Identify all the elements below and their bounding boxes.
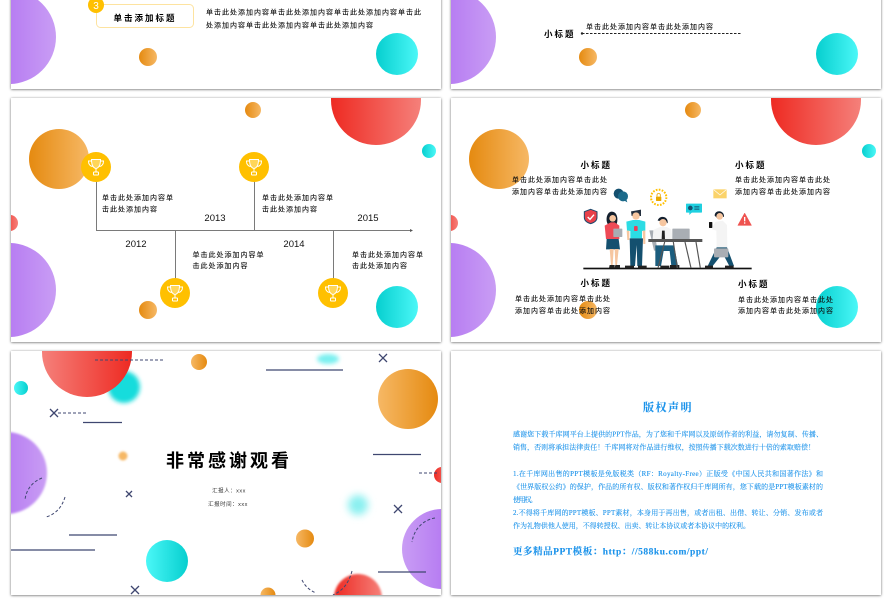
- caption top left: 添加内容单击此处添加内容: [512, 187, 608, 196]
- caption bottom left: 添加内容单击此处添加内容: [515, 306, 611, 315]
- caption bottom right: 小标题: [738, 279, 770, 289]
- slide 5: thank-you page: [0, 307, 482, 600]
- illustration: team at desk: [583, 189, 752, 269]
- purple circle: [451, 0, 496, 84]
- slide 1: numbered heading fragment: [0, 0, 441, 89]
- icon: warning: [738, 213, 751, 225]
- timeline axis: [96, 180, 413, 280]
- orange circle right: [378, 369, 438, 429]
- more templates link: 更多精品PPT模板：http：//588ku.com/ppt/: [513, 546, 708, 558]
- copyright body: 使用权。: [513, 495, 537, 504]
- copyright body: 《世界版权公约》的保护，作品的所有权、版权和著作权归千库网所有，您下载的是PPT模板素材的: [513, 482, 823, 492]
- caption top right: 添加内容单击此处添加内容: [735, 187, 831, 196]
- person: seated man with laptop: [648, 217, 702, 268]
- icon: shield: [584, 209, 597, 224]
- red circle bottom: [334, 574, 382, 600]
- decorative circles: [451, 98, 876, 337]
- caption top right: 单击此处添加内容单击此处: [735, 175, 831, 184]
- milestone text: 击此处添加内容: [192, 261, 248, 270]
- milestone text: 单击此处添加内容单: [262, 193, 334, 202]
- dashed leader: [581, 32, 741, 35]
- heading box: [96, 4, 194, 28]
- trophy marker 4: [318, 278, 348, 308]
- copyright body: 销售，否则将承担法律责任！千库网将对作品进行维权，按照传播下载次数进行十倍的索取赔偿！: [513, 442, 815, 452]
- caption top left: 单击此处添加内容单击此处: [512, 175, 608, 184]
- caption bottom left: 小标题: [580, 278, 612, 288]
- caption top right: 小标题: [735, 160, 767, 170]
- body text: 单击此处添加内容单击此处添加内容单击此处添加内容单击此: [206, 8, 422, 16]
- caption bottom left: 单击此处添加内容单击此处: [515, 294, 611, 303]
- year labels: 2012: [125, 239, 147, 250]
- number badge: 3: [93, 1, 99, 12]
- milestone text: 击此处添加内容: [352, 261, 408, 270]
- copyright body: 作为礼物供他人使用，不得转授权、出卖、转让本协议或者本协议中的权利。: [513, 521, 750, 531]
- year labels: 2014: [283, 239, 305, 250]
- year labels: 2013: [204, 213, 226, 224]
- icon: profile message: [686, 204, 702, 215]
- body text: 单击此处添加内容单击此处添加内容: [586, 22, 714, 31]
- caption bottom left: [515, 278, 612, 315]
- red small right: [434, 467, 450, 483]
- slide 2: subtitle with dashed leader: [402, 0, 881, 89]
- orange dot: [579, 48, 597, 66]
- trophy marker 2: [160, 278, 190, 308]
- trophy marker 3: [239, 152, 269, 182]
- cyan small circle: [14, 381, 28, 395]
- milestone text: 击此处添加内容: [262, 204, 318, 214]
- copyright body: 2.不得将千库网的PPT模板、PPT素材，本身用于再出售，或者出租、出借、转让、分销、发布或者: [513, 508, 823, 518]
- orange dot lower: [296, 530, 314, 548]
- cyan circle lower: [146, 540, 188, 582]
- blurred cyan glow: [348, 495, 368, 515]
- cross marks: [50, 354, 402, 594]
- navy lines: [11, 360, 438, 572]
- milestone text: [102, 193, 424, 270]
- heading text: 单击添加标题: [113, 13, 177, 23]
- thank-you title: 非常感谢观看: [166, 451, 292, 471]
- caption top right: [735, 160, 831, 196]
- icon: chat bubbles: [614, 189, 628, 202]
- decorative circles: [11, 98, 436, 337]
- red circle top: [42, 307, 132, 397]
- milestone text: 单击此处添加内容单: [192, 250, 264, 259]
- body text: 处添加内容单击此处添加内容单击此处添加内容: [206, 20, 374, 30]
- copyright heading: 版权声明: [643, 400, 693, 414]
- cyan circle: [816, 33, 858, 75]
- year labels: [126, 214, 378, 247]
- slide 6: copyright notice: [451, 351, 881, 595]
- caption bottom right: 单击此处添加内容单击此处: [738, 295, 834, 304]
- year labels: 2015: [357, 213, 379, 224]
- copyright body: [513, 430, 823, 531]
- copyright body: 1.在千库网出售的PPT模板是免版税类（RF：Royalty-Free）正版受《中国人民共和国著作法》和: [513, 469, 823, 478]
- caption bottom right: [738, 279, 834, 315]
- icon: lock in dotted ring: [651, 190, 666, 205]
- ground line: [583, 268, 752, 269]
- orange dot: [139, 48, 157, 66]
- trophy marker 1: [81, 152, 111, 182]
- purple circle: [11, 0, 56, 84]
- purple circle right: [402, 509, 482, 589]
- slide 4: team illustration with captions: [449, 96, 883, 344]
- caption top left: [512, 160, 612, 196]
- orange dot top: [191, 354, 207, 370]
- person: walking man with briefcase: [705, 211, 734, 268]
- blurred purple circle: [0, 432, 47, 514]
- body text: [206, 8, 422, 30]
- subtitle: 小标题: [544, 29, 576, 39]
- orange dot bottom: [260, 588, 276, 600]
- caption top left: 小标题: [580, 160, 612, 170]
- cyan circle: [376, 33, 418, 75]
- copyright body: 感谢您下载千库网平台上提供的PPT作品，为了您和千库网以及原创作者的利益，请勿复制、传播、: [513, 430, 823, 440]
- icon: envelope: [713, 189, 727, 198]
- blurred orange dot: [118, 452, 128, 460]
- date line: 汇报时间：xxx: [208, 500, 248, 508]
- person: woman with tablet: [605, 212, 622, 268]
- dashed arcs: [25, 478, 435, 595]
- person: man in cyan shirt: [625, 210, 647, 268]
- milestone text: 击此处添加内容: [102, 204, 158, 214]
- caption bottom right: 添加内容单击此处添加内容: [738, 306, 834, 315]
- number badge: [88, 0, 104, 13]
- milestone text: 单击此处添加内容单: [102, 193, 174, 202]
- milestone text: 单击此处添加内容单: [352, 250, 424, 259]
- reporter line: 汇报人：xxx: [212, 486, 246, 494]
- blurred cyan ellipse: [317, 354, 339, 364]
- slide 3: timeline: [9, 96, 443, 344]
- blurred cyan circle: [108, 371, 140, 403]
